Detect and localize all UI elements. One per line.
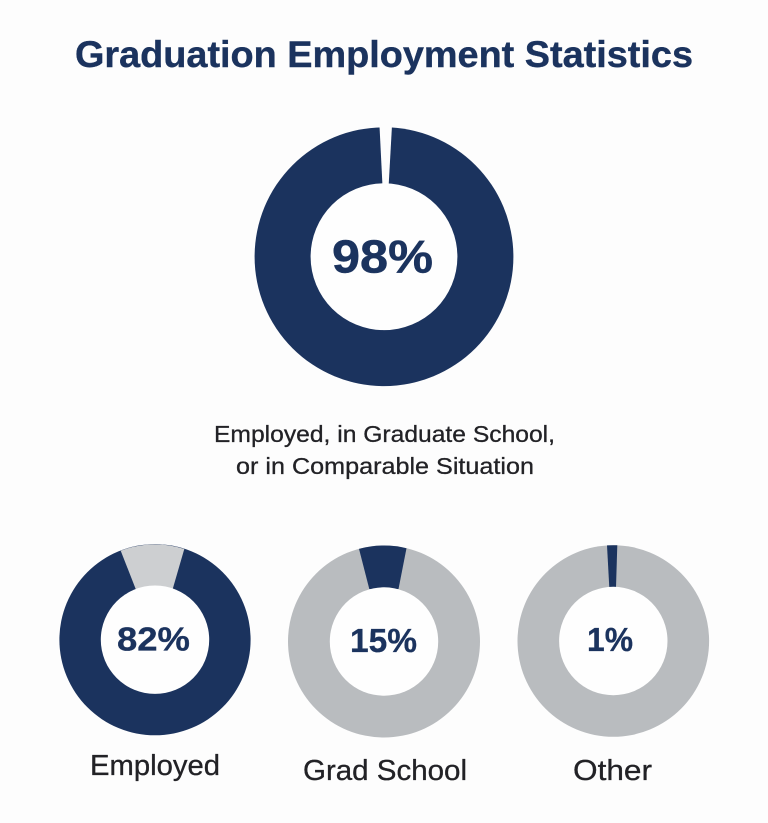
donut chart: employed 82%: 82% xyxy=(117,621,190,658)
label: grad school: Grad School xyxy=(303,755,467,787)
donut chart: grad school 15%: 15% xyxy=(350,622,417,659)
main donut chart: 98% xyxy=(255,120,513,386)
donut chart: employed 82% xyxy=(59,544,251,735)
donut chart: grad school 15% xyxy=(288,546,480,738)
description text xyxy=(214,421,555,479)
donut chart: other 1% xyxy=(518,545,709,737)
main donut chart: 98%: 98% xyxy=(332,231,433,283)
label: other: Other xyxy=(573,755,652,787)
title: Graduation Employment Statistics xyxy=(75,33,693,75)
donut chart: other 1%: 1% xyxy=(587,621,633,658)
description text: or in Comparable Situation xyxy=(236,453,534,479)
description text: Employed, in Graduate School, xyxy=(214,421,555,447)
label: employed: Employed xyxy=(90,750,220,782)
